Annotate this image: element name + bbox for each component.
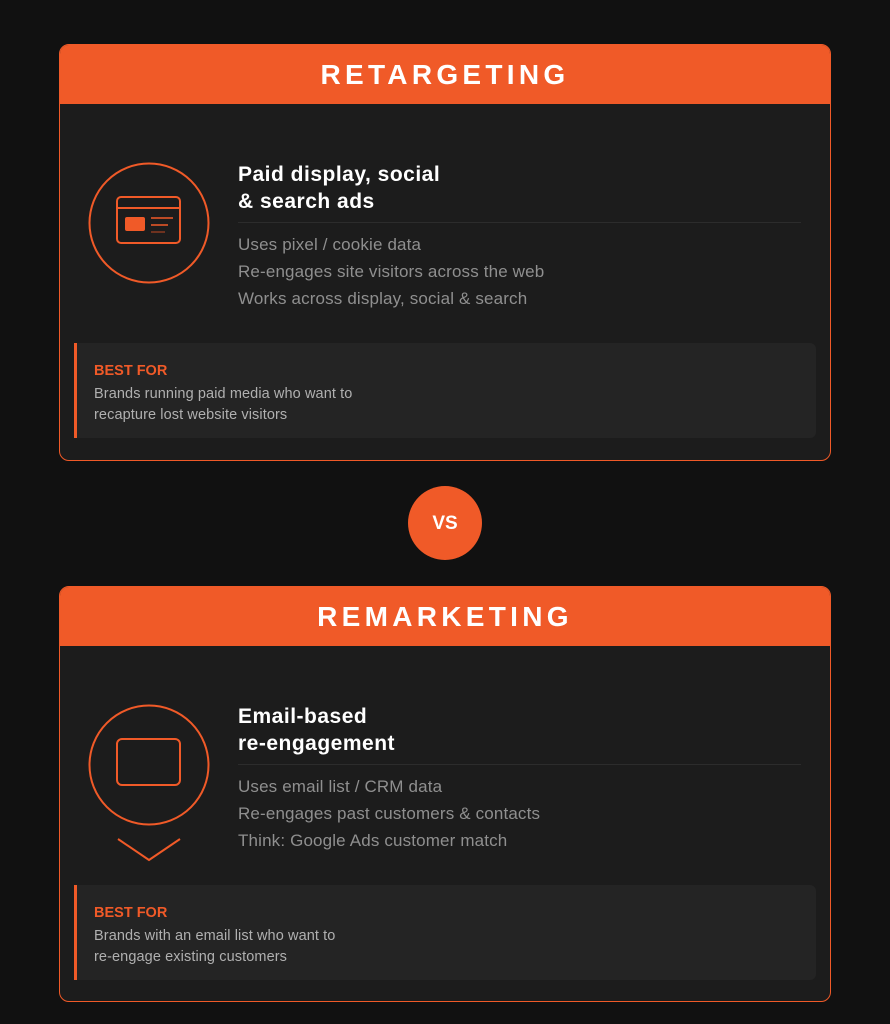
callout: best for: Brands running paid media who want to — [94, 386, 352, 402]
bullet list: Re-engages site visitors across the web — [238, 262, 544, 281]
title text: Email-based — [238, 705, 367, 728]
heading: remarketing — [60, 587, 830, 646]
title text — [238, 705, 395, 755]
callout: best for — [74, 343, 816, 438]
callout: best for: BEST FOR — [94, 905, 167, 921]
vs badge: VS — [432, 513, 458, 534]
heading: retargeting — [60, 45, 830, 104]
icon: email box with chevron — [88, 704, 210, 862]
panel: retargeting — [59, 44, 831, 461]
title text — [238, 163, 440, 213]
heading: retargeting: RETARGETING — [320, 59, 570, 90]
vs badge — [408, 486, 482, 560]
callout: best for — [74, 885, 816, 980]
bullet list: Re-engages past customers & contacts — [238, 804, 540, 823]
heading: remarketing: REMARKETING — [317, 601, 573, 632]
panel: remarketing — [59, 586, 831, 1002]
bullet list: Works across display, social & search — [238, 289, 527, 308]
bullet list: Uses pixel / cookie data — [238, 235, 421, 254]
bullet list: Uses email list / CRM data — [238, 777, 442, 796]
bullet list — [238, 777, 540, 850]
title text: & search ads — [238, 190, 375, 213]
callout: best for: Brands with an email list who want to — [94, 928, 335, 944]
title text: Paid display, social — [238, 163, 440, 186]
bullet list: Think: Google Ads customer match — [238, 831, 507, 850]
callout: best for: recapture lost website visitors — [94, 407, 287, 423]
callout: best for: BEST FOR — [94, 363, 167, 379]
icon: ad card — [88, 162, 210, 284]
callout: best for: re-engage existing customers — [94, 949, 287, 965]
title text: re-engagement — [238, 732, 395, 755]
bullet list — [238, 235, 544, 308]
